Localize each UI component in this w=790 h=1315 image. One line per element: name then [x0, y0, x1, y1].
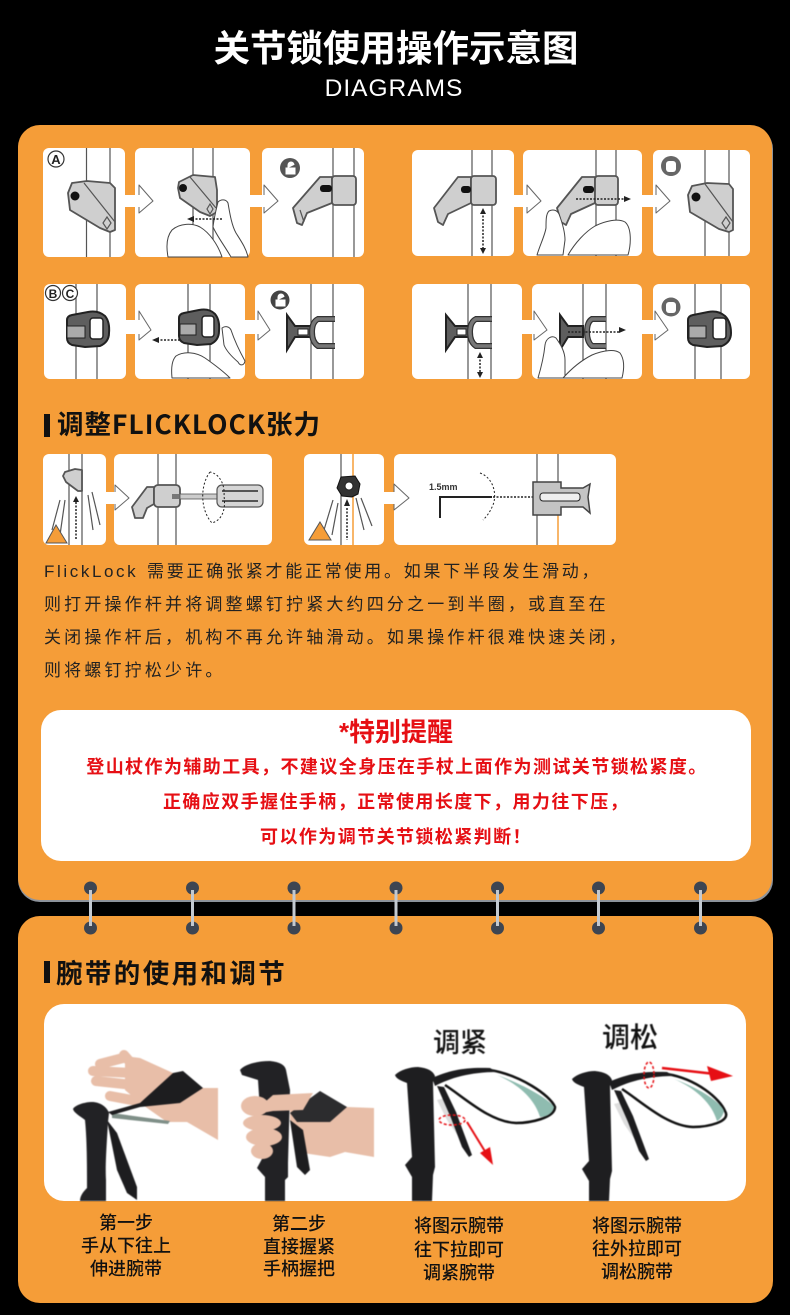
- caption: step 1: [81, 1213, 171, 1279]
- panel: wrist strap: [18, 916, 773, 1303]
- caption: step 2: 直接握紧: [263, 1237, 335, 1257]
- photo: hand gripping handle: [240, 1061, 374, 1201]
- caption: loosen: 将图示腕带: [592, 1215, 682, 1236]
- caption: step 1: 手从下往上: [81, 1236, 171, 1256]
- callout: special reminder: *特别提醒: [339, 717, 453, 747]
- caption: step 2: 手柄握把: [263, 1259, 335, 1279]
- caption: step 2: [263, 1214, 335, 1279]
- text block: flicklock instruction: [44, 561, 629, 680]
- callout: special reminder: [41, 710, 751, 861]
- heading: wrist strap: 腕带的使用和调节: [56, 959, 287, 989]
- caption: tighten: 调紧腕带: [423, 1262, 495, 1283]
- binding rings: [84, 882, 707, 934]
- diagram: B C lever closing: [412, 284, 750, 379]
- title: [214, 28, 578, 102]
- diagram: A lever closing: [412, 150, 750, 256]
- text block: flicklock instruction: 则将螺钉拧松少许。: [44, 661, 226, 680]
- diagram: tension adjust hex key: 1.5mm: [429, 482, 458, 492]
- diagram: A lever opening: A: [51, 152, 61, 167]
- text block: flicklock instruction: 需要正确张紧才能正常使用。如果下半段发生滑动，: [147, 561, 601, 581]
- caption: step 1: 伸进腕带: [90, 1258, 162, 1279]
- photo: hand entering strap: [73, 1055, 218, 1201]
- title: 关节锁使用操作示意图: [214, 28, 578, 69]
- photo: tighten strap: [395, 1028, 555, 1201]
- callout: special reminder: 可以作为调节关节锁松紧判断！: [260, 826, 532, 847]
- caption: loosen: 调松腕带: [601, 1261, 673, 1282]
- caption: tighten: 往下拉即可: [414, 1239, 504, 1260]
- callout: special reminder: 正确应双手握住手柄，正常使用长度下，用力往下压，: [163, 791, 629, 812]
- text block: flicklock instruction: 关闭操作杆后，机构不再允许轴滑动。如果操作杆很难快速关闭，: [44, 628, 629, 647]
- caption: tighten: [414, 1215, 504, 1283]
- caption: loosen: 往外拉即可: [592, 1238, 682, 1259]
- caption: step 2: 第二步: [272, 1214, 326, 1234]
- diagram: B C lever opening: C: [66, 287, 75, 301]
- callout: special reminder: 登山杖作为辅助工具，不建议全身压在手杖上面作为测试关节锁松紧度。: [86, 756, 708, 777]
- photo: loosen strap: 调松: [602, 1022, 658, 1053]
- caption: loosen: [592, 1215, 682, 1282]
- text block: flicklock instruction: FlickLock: [44, 562, 138, 581]
- caption: step 1: 第一步: [99, 1213, 153, 1233]
- diagram: A lever opening: [43, 148, 364, 257]
- diagram: tension adjust hex key: [304, 454, 616, 545]
- photo: loosen strap: [572, 1022, 733, 1201]
- photo: tighten strap: 调紧: [433, 1028, 487, 1058]
- diagram: B C lever opening: [44, 284, 364, 379]
- diagram: B C lever opening: B: [49, 287, 58, 301]
- panel: flicklock instructions: [18, 125, 773, 902]
- panel: strap photos: [44, 1004, 746, 1201]
- caption: tighten: 将图示腕带: [414, 1215, 504, 1236]
- title: DIAGRAMS: [325, 75, 463, 102]
- diagram: tension adjust screwdriver: [43, 454, 272, 545]
- text block: flicklock instruction: 则打开操作杆并将调整螺钉拧紧大约四分之一到半圈，或直至在: [44, 595, 609, 614]
- heading: flicklock tension: 调整FLICKLOCK张力: [57, 403, 320, 442]
